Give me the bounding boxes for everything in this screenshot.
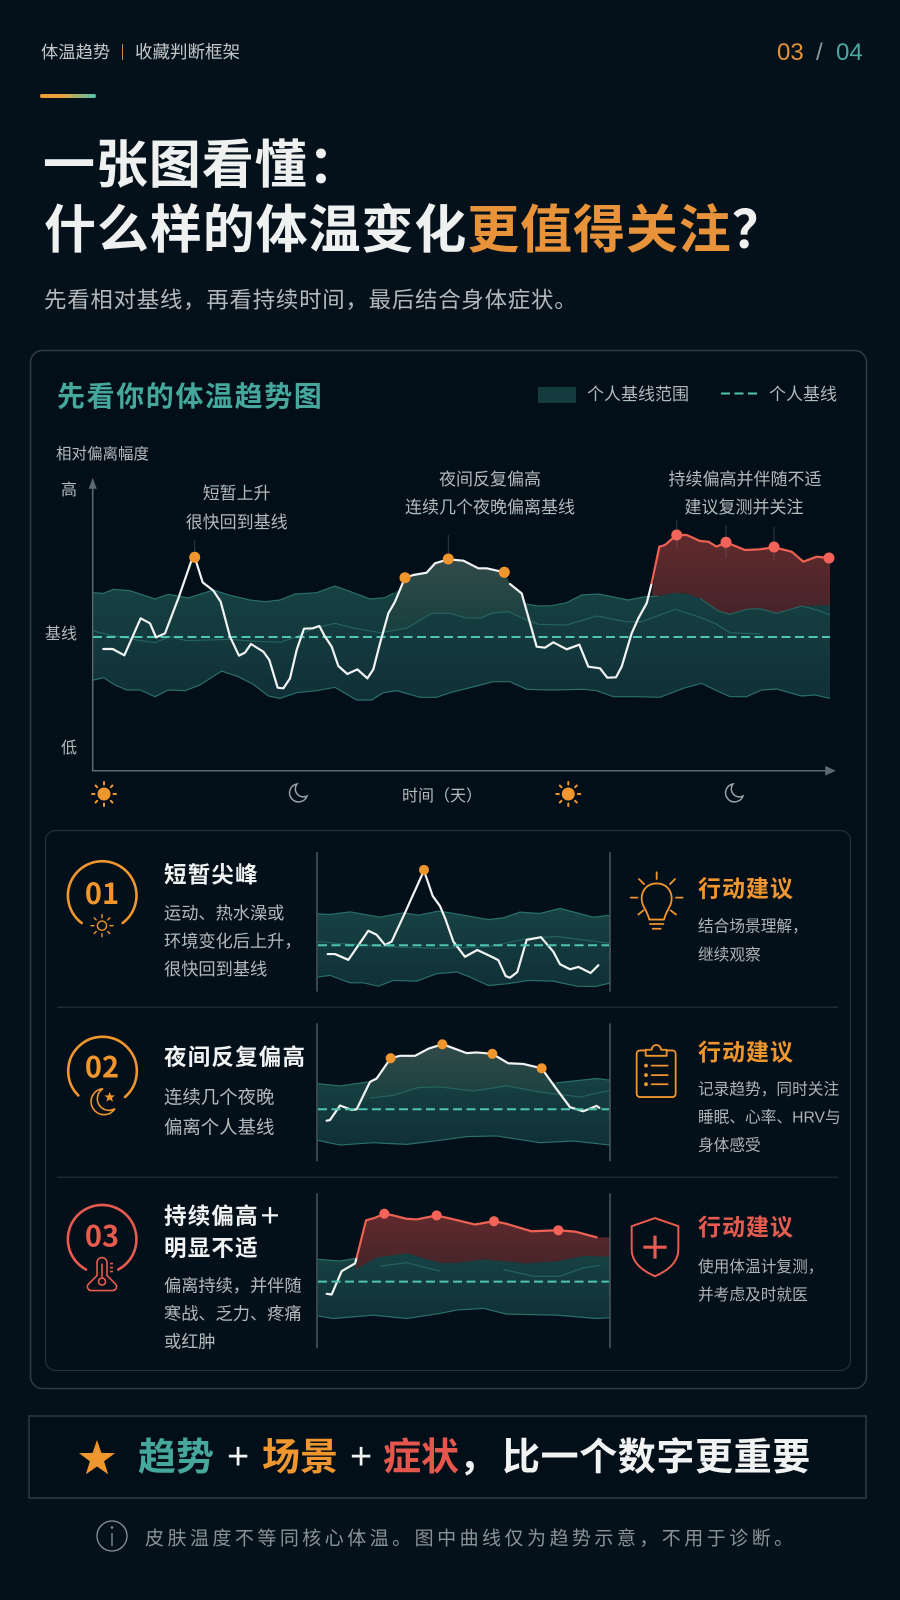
y axis ticks xyxy=(45,481,77,757)
takeaway text: 趋势 xyxy=(138,1437,214,1479)
header label xyxy=(41,42,240,62)
mini chart: spike xyxy=(318,865,610,987)
mini chart: sustained xyxy=(318,1209,610,1318)
badge 01 xyxy=(68,861,136,937)
badge 03 xyxy=(68,1205,136,1291)
takeaway text: 场景 xyxy=(262,1437,338,1479)
row 03 text xyxy=(164,1204,302,1352)
action text 02: 睡眠、心率、HRV与 xyxy=(698,1109,841,1127)
badge 02 xyxy=(68,1037,137,1115)
legend: 个人基线 xyxy=(769,385,837,404)
row 02: night elevation xyxy=(68,1023,841,1161)
title: 什么样的体温变化更值得关注？ xyxy=(44,202,785,260)
page number: 03 xyxy=(777,39,804,66)
y axis ticks: 低 xyxy=(61,739,77,757)
action text 03: 并考虑及时就医 xyxy=(698,1286,808,1304)
row 02 text: 连续几个夜晚 xyxy=(164,1086,274,1108)
annotation: night elevation: 连续几个夜晚偏离基线 xyxy=(405,498,575,517)
y axis label: 相对偏离幅度 xyxy=(56,445,149,463)
action text 01: 行动建议 xyxy=(698,876,794,902)
icon: sun xyxy=(92,782,116,806)
annotation: night elevation xyxy=(405,470,575,517)
page number: 04 xyxy=(836,39,863,66)
annotation: sustained elevation xyxy=(668,470,822,517)
row 01 text: 短暂尖峰 xyxy=(164,862,259,887)
icon: shield xyxy=(632,1218,678,1276)
panel: trend chart xyxy=(30,350,866,1388)
annotation: brief rise: 短暂上升 xyxy=(203,484,271,503)
temperature curve xyxy=(103,535,829,688)
row 02 text: 偏离个人基线 xyxy=(164,1116,274,1138)
action text 03 xyxy=(698,1214,824,1304)
y axis ticks: 高 xyxy=(61,481,77,499)
title: 一张图看懂 xyxy=(43,137,308,195)
red area: sustained elevation xyxy=(652,535,830,615)
row 01: brief spike xyxy=(68,852,808,992)
annotation: brief rise: 很快回到基线 xyxy=(186,513,288,532)
baseline band xyxy=(93,580,830,700)
row 01 text: 环境变化后上升， xyxy=(164,931,302,951)
row 03: sustained elevation xyxy=(68,1193,824,1352)
row 03 text: 持续偏高＋ xyxy=(164,1204,283,1229)
row 02 text xyxy=(164,1044,306,1138)
row 03 text: 明显不适 xyxy=(164,1236,259,1261)
takeaway text: + xyxy=(350,1436,372,1478)
title: ： xyxy=(308,123,361,198)
peak tick lines xyxy=(195,520,774,560)
y axis ticks: 基线 xyxy=(45,625,77,643)
dome area: night elevation xyxy=(383,559,538,633)
mini chart: night xyxy=(318,1039,610,1145)
disclaimer: 皮肤温度不等同核心体温。图中曲线仅为趋势示意，不用于诊断。 xyxy=(145,1528,797,1550)
row 01 text: 运动、热水澡或 xyxy=(164,903,284,923)
takeaway banner xyxy=(29,1416,866,1498)
accent bar xyxy=(40,94,96,98)
title xyxy=(43,123,785,260)
page number xyxy=(777,39,863,66)
axes xyxy=(90,480,834,774)
action text 01 xyxy=(698,876,808,964)
takeaway text: 症状 xyxy=(383,1437,459,1479)
icon: clipboard xyxy=(637,1045,676,1097)
page number: / xyxy=(816,39,823,66)
action text 02 xyxy=(698,1039,841,1154)
badge 02: 02 xyxy=(85,1044,119,1086)
band inner lines xyxy=(93,609,760,643)
action text 01: 结合场景理解， xyxy=(698,918,808,936)
action text 03: 使用体温计复测， xyxy=(698,1258,824,1276)
badge 01: 01 xyxy=(85,871,119,913)
annotation: brief rise xyxy=(186,484,288,532)
icon: sun xyxy=(556,782,580,806)
icon: moon xyxy=(726,784,743,802)
row 03 text: 偏离持续，并伴随 xyxy=(164,1276,302,1296)
x axis label: 时间（天） xyxy=(402,787,482,805)
panel: pattern rows xyxy=(46,830,850,1370)
legend: 个人基线范围 xyxy=(587,385,689,404)
takeaway text: ， xyxy=(459,1437,497,1479)
icon: lightbulb xyxy=(631,872,683,929)
annotation: night elevation: 夜间反复偏高 xyxy=(439,470,541,489)
action text 03: 行动建议 xyxy=(698,1214,794,1240)
icon: star xyxy=(79,1440,115,1474)
legend xyxy=(538,385,837,404)
action text 02: 记录趋势，同时关注 xyxy=(698,1081,839,1099)
row 01 text: 很快回到基线 xyxy=(164,959,267,979)
icon: info xyxy=(97,1521,127,1551)
annotation: sustained elevation: 建议复测并关注 xyxy=(684,498,804,517)
peak markers xyxy=(189,530,834,583)
row 01 text xyxy=(164,862,302,979)
header label: 收藏判断框架 xyxy=(135,42,240,62)
action text 01: 继续观察 xyxy=(698,946,761,964)
row 03 text: 或红肿 xyxy=(164,1332,216,1352)
personal baseline xyxy=(93,636,830,638)
row 02 text: 夜间反复偏高 xyxy=(164,1044,306,1070)
takeaway text: 比一个数字更重要 xyxy=(502,1437,811,1479)
badge 03: 03 xyxy=(85,1213,119,1255)
header label: 体温趋势 xyxy=(41,42,110,62)
takeaway text xyxy=(138,1436,811,1479)
chart title: 先看你的体温趋势图 xyxy=(57,381,323,412)
row 03 text: 寒战、乏力、疼痛 xyxy=(164,1304,302,1324)
takeaway text: + xyxy=(227,1436,249,1478)
annotation: sustained elevation: 持续偏高并伴随不适 xyxy=(668,470,822,489)
action text 02: 身体感受 xyxy=(698,1136,761,1154)
subtitle: 先看相对基线，再看持续时间，最后结合身体症状。 xyxy=(44,288,577,312)
icon: moon xyxy=(290,784,307,802)
action text 02: 行动建议 xyxy=(698,1039,794,1065)
